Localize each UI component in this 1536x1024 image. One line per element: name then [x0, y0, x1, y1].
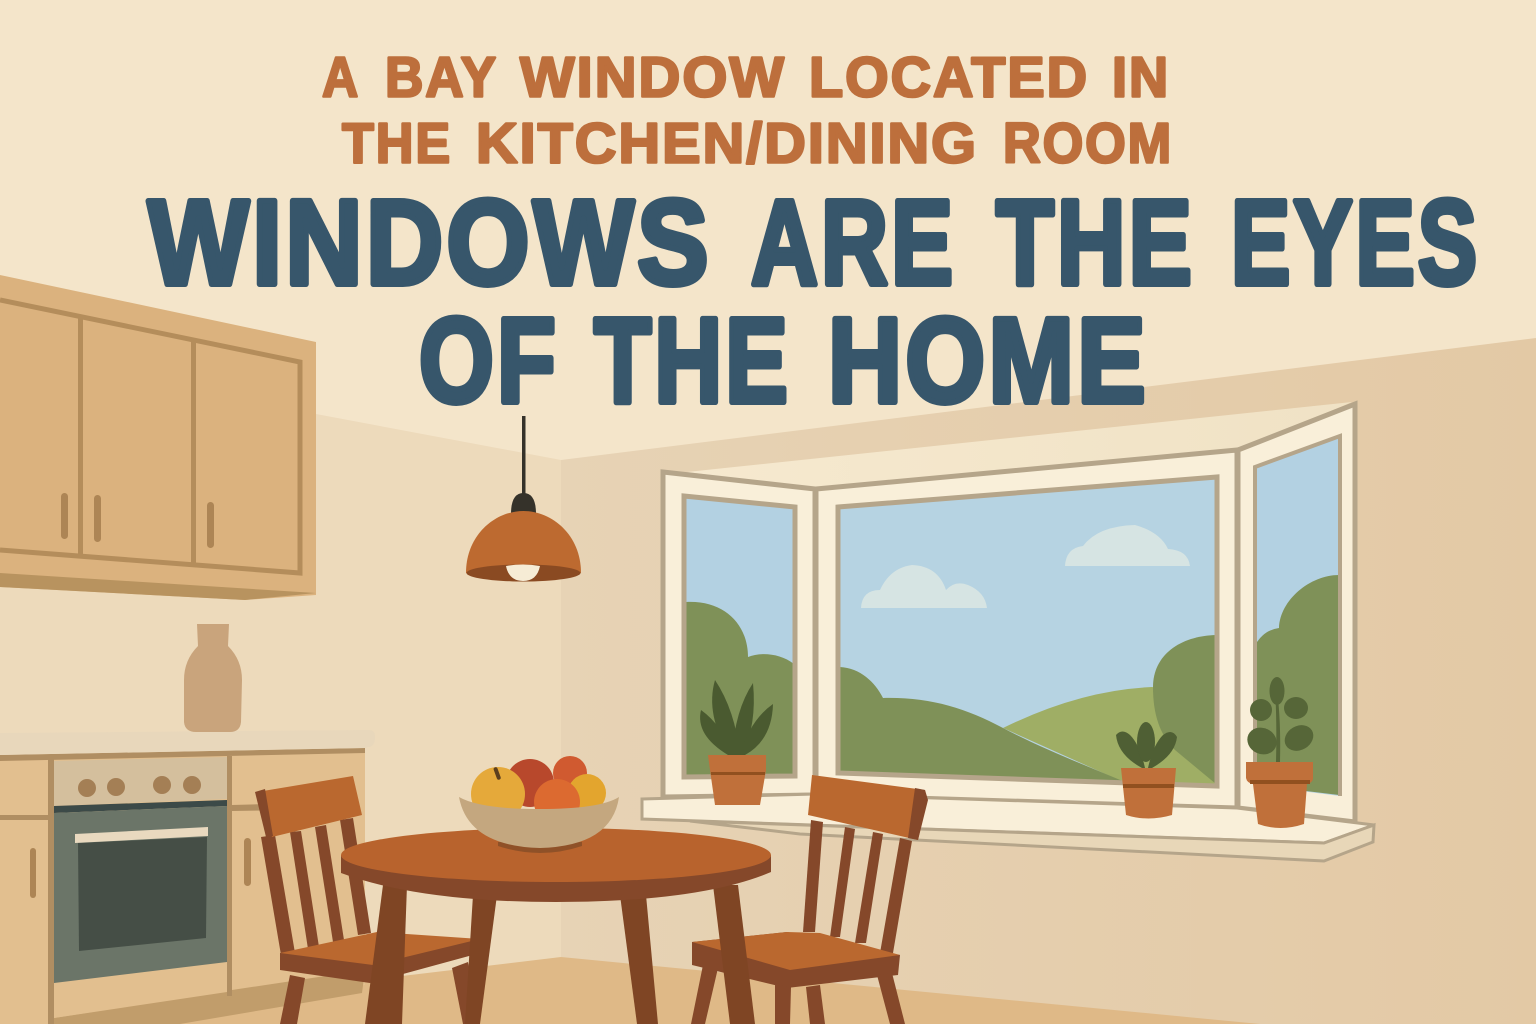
dining table	[341, 828, 771, 1024]
oven	[54, 757, 227, 1018]
clouds	[861, 565, 987, 608]
main title: ARE	[751, 174, 956, 310]
main title: WINDOWS	[148, 174, 712, 310]
upper kitchen cabinets	[0, 275, 316, 600]
main title: OF	[419, 292, 559, 428]
main title	[148, 174, 1480, 428]
right pane	[1255, 436, 1340, 796]
right wall	[561, 338, 1536, 1024]
plant: centre	[1116, 722, 1177, 818]
left frame	[663, 472, 815, 797]
vase	[184, 624, 242, 732]
pendant lamp	[466, 416, 581, 582]
right frame	[1238, 404, 1355, 822]
eyebrow heading	[322, 46, 1173, 176]
centre pane	[838, 477, 1217, 786]
main title: THE	[594, 292, 791, 428]
left pane	[684, 496, 795, 777]
floor	[0, 957, 1260, 1024]
left wall	[0, 360, 561, 1024]
fruit bowl	[459, 756, 619, 853]
window sill	[642, 794, 1374, 861]
window soffit	[687, 402, 1352, 488]
eyebrow heading: BAY	[385, 46, 498, 110]
counter and lower cabinets	[0, 730, 375, 1024]
eyebrow heading: A	[322, 46, 360, 110]
eyebrow heading: THE	[342, 112, 452, 176]
plinth	[54, 970, 365, 1024]
plant: right	[1243, 677, 1318, 828]
right chair	[691, 775, 928, 1024]
eyebrow heading: KITCHEN/DINING	[476, 112, 978, 176]
eyebrow heading: WINDOW	[520, 46, 786, 110]
centre frame	[816, 450, 1237, 808]
eyebrow heading: IN	[1112, 46, 1170, 110]
bay window	[642, 402, 1374, 861]
main title: THE	[996, 174, 1195, 310]
left chair	[255, 776, 480, 1024]
eyebrow heading: LOCATED	[809, 46, 1089, 110]
hills	[1003, 687, 1216, 785]
plant: left	[700, 680, 773, 805]
cabinet handles	[61, 493, 214, 548]
eyebrow heading: ROOM	[1003, 112, 1173, 176]
main title: HOME	[828, 292, 1149, 428]
